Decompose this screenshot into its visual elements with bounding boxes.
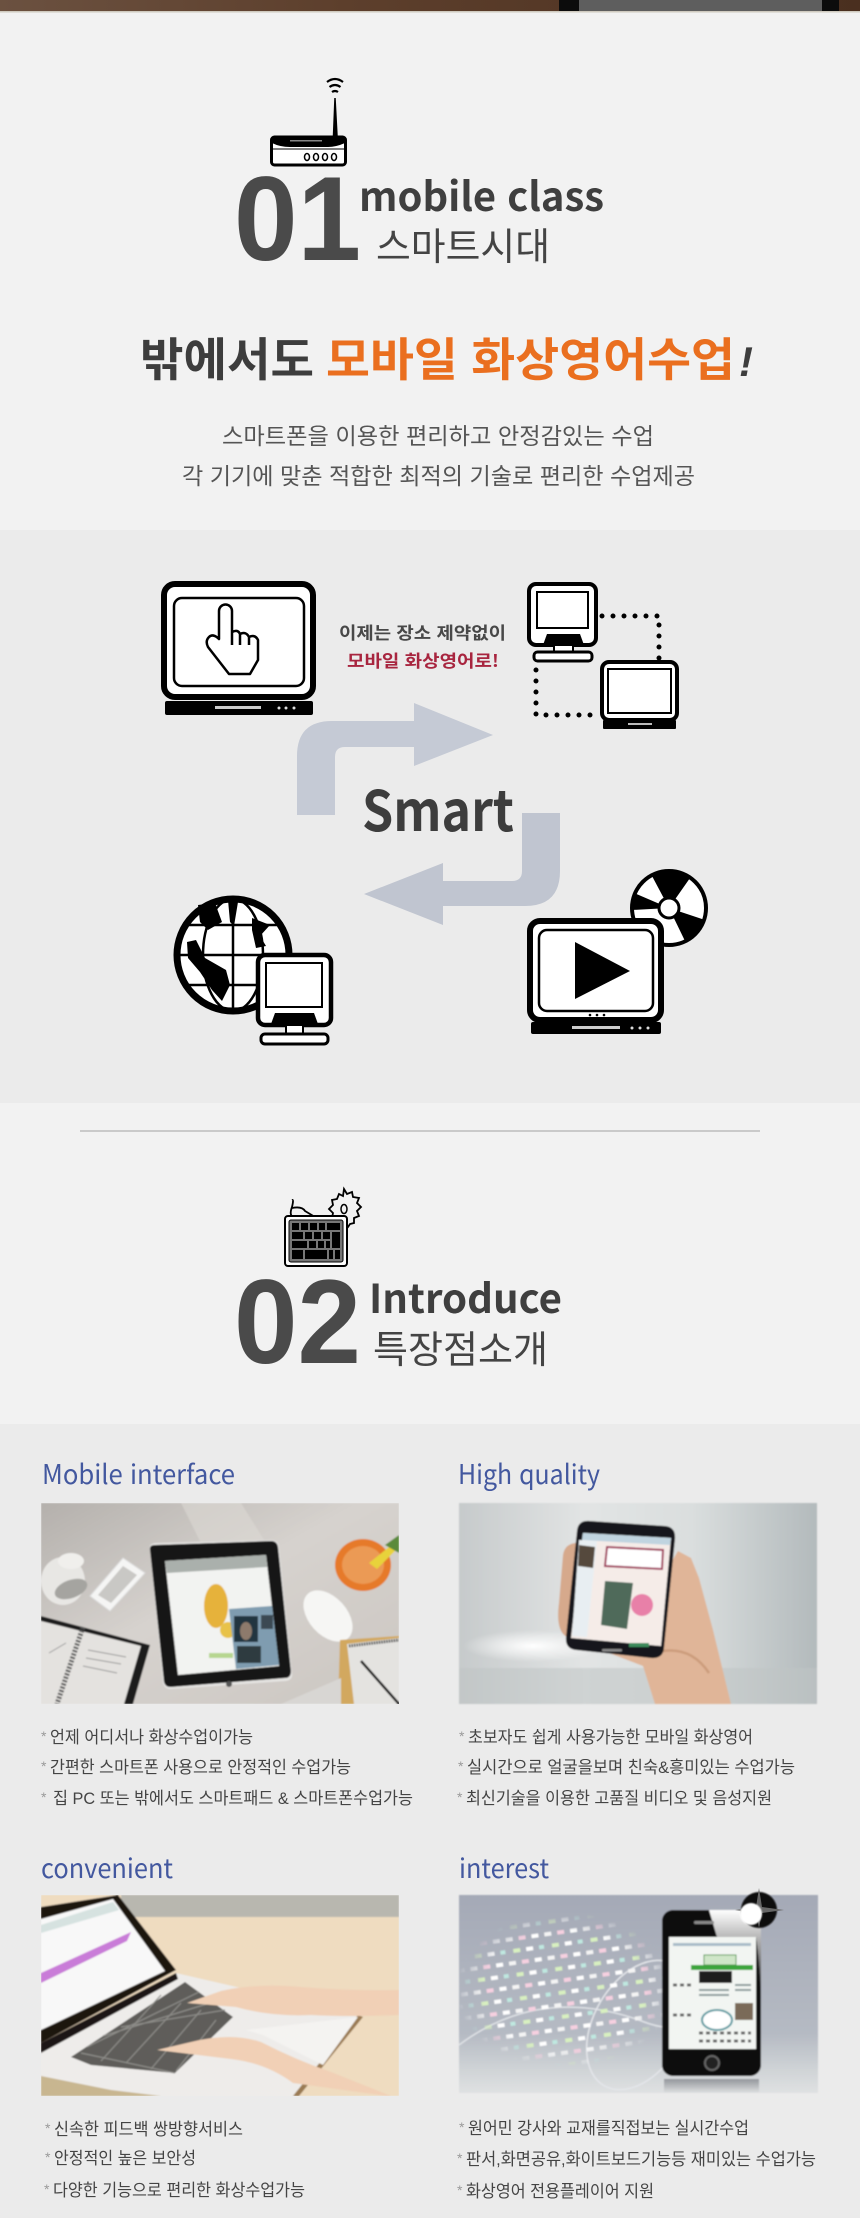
bullet list: * — [459, 2119, 465, 2135]
callout: 이제는 장소 제약없이 — [339, 619, 506, 644]
card: Mobile interface — [41, 1453, 413, 1808]
photo: tablet on desk — [41, 1503, 399, 1704]
lens flare — [735, 1888, 784, 1928]
heading: convenient — [41, 1847, 173, 1886]
top photo strip — [0, 0, 860, 12]
heading: interest — [459, 1847, 549, 1886]
card: High quality — [457, 1453, 817, 1808]
number 02: 02 — [234, 1255, 361, 1389]
intro text — [182, 417, 695, 491]
bullet list: 실시간으로 얼굴을보며 친숙&흥미있는 수업가능 — [467, 1758, 795, 1777]
number 01: 01 — [234, 152, 361, 286]
card: convenient — [41, 1847, 399, 2200]
bullet list: * — [45, 2149, 51, 2165]
bullet list: 원어민 강사와 교재를직접보는 실시간수업 — [468, 2119, 749, 2138]
panel: features — [41, 1462, 820, 2198]
bullet list: * — [44, 2181, 50, 2197]
bullet list: 신속한 피드백 쌍방향서비스 — [54, 2120, 243, 2139]
bullet list: * — [41, 1728, 47, 1744]
intro text: 스마트폰을 이용한 편리하고 안정감있는 수업 — [222, 417, 654, 451]
heading: High quality — [458, 1453, 600, 1492]
section 1 heading — [234, 79, 604, 286]
bullet list — [457, 2119, 816, 2201]
headline: ! — [739, 338, 753, 385]
bullet list: * — [45, 2120, 51, 2136]
arrow: lower turn — [364, 813, 560, 925]
panel: smart cycle — [0, 530, 860, 1103]
bullet list: 최신기술을 이용한 고품질 비디오 및 음성지원 — [466, 1789, 772, 1808]
intro text: 각 기기에 맞춘 적합한 최적의 기술로 편리한 수업제공 — [182, 457, 695, 491]
arrow: upper turn — [297, 703, 493, 815]
icon: video player and disc — [530, 871, 706, 1034]
title: mobile class: mobile class — [359, 165, 604, 223]
icon: connected computers — [529, 584, 677, 729]
bullet list: * — [457, 2182, 463, 2198]
bullet list — [44, 2120, 305, 2200]
label: Smart: Smart — [362, 767, 514, 848]
icon: globe with computer — [177, 899, 331, 1044]
callout: 모바일 화상영어로! — [347, 647, 499, 672]
subtitle: 스마트시대 — [376, 216, 550, 271]
subtitle: 특장점소개 — [373, 1319, 548, 1374]
photo: typing on laptop — [41, 1895, 399, 2096]
bullet list: 화상영어 전용플레이어 지원 — [466, 2182, 654, 2201]
bullet list: 안정적인 높은 보안성 — [54, 2149, 196, 2168]
bullet list: 판서,화면공유,화이트보드기능등 재미있는 수업가능 — [466, 2150, 816, 2169]
bullet list: * — [457, 1789, 463, 1805]
bullet list: * — [458, 1758, 464, 1774]
icon: wifi router — [272, 79, 346, 165]
bullet list: 언제 어디서나 화상수업이가능 — [50, 1728, 253, 1747]
bullet list: 초보자도 쉽게 사용가능한 모바일 화상영어 — [468, 1728, 753, 1747]
bullet list: * — [459, 1728, 465, 1744]
bullet list: * — [41, 1758, 47, 1774]
bullet list: * — [41, 1789, 47, 1805]
callout — [339, 619, 506, 672]
icon: keyboard and gear — [285, 1189, 361, 1266]
headline — [140, 324, 753, 390]
title: Introduce: Introduce — [369, 1267, 562, 1325]
section 2 heading — [234, 1189, 562, 1389]
bullet list: * — [457, 2150, 463, 2166]
bullet list: 다양한 기능으로 편리한 화상수업가능 — [53, 2181, 305, 2200]
bullet list: 집 PC 또는 밖에서도 스마트패드 & 스마트폰수업가능 — [53, 1789, 413, 1808]
photo: phone in hand — [459, 1503, 817, 1704]
bullet list — [41, 1728, 413, 1808]
headline: 밖에서도 — [140, 324, 314, 390]
heading: Mobile interface — [42, 1453, 235, 1492]
bullet list: 간편한 스마트폰 사용으로 안정적인 수업가능 — [50, 1758, 351, 1777]
icon: touch screen — [164, 584, 313, 715]
bullet list — [457, 1728, 795, 1808]
photo: smartphone with globe — [459, 1888, 818, 2108]
card: interest — [457, 1847, 818, 2201]
headline: 모바일 화상영어수업 — [326, 324, 735, 390]
